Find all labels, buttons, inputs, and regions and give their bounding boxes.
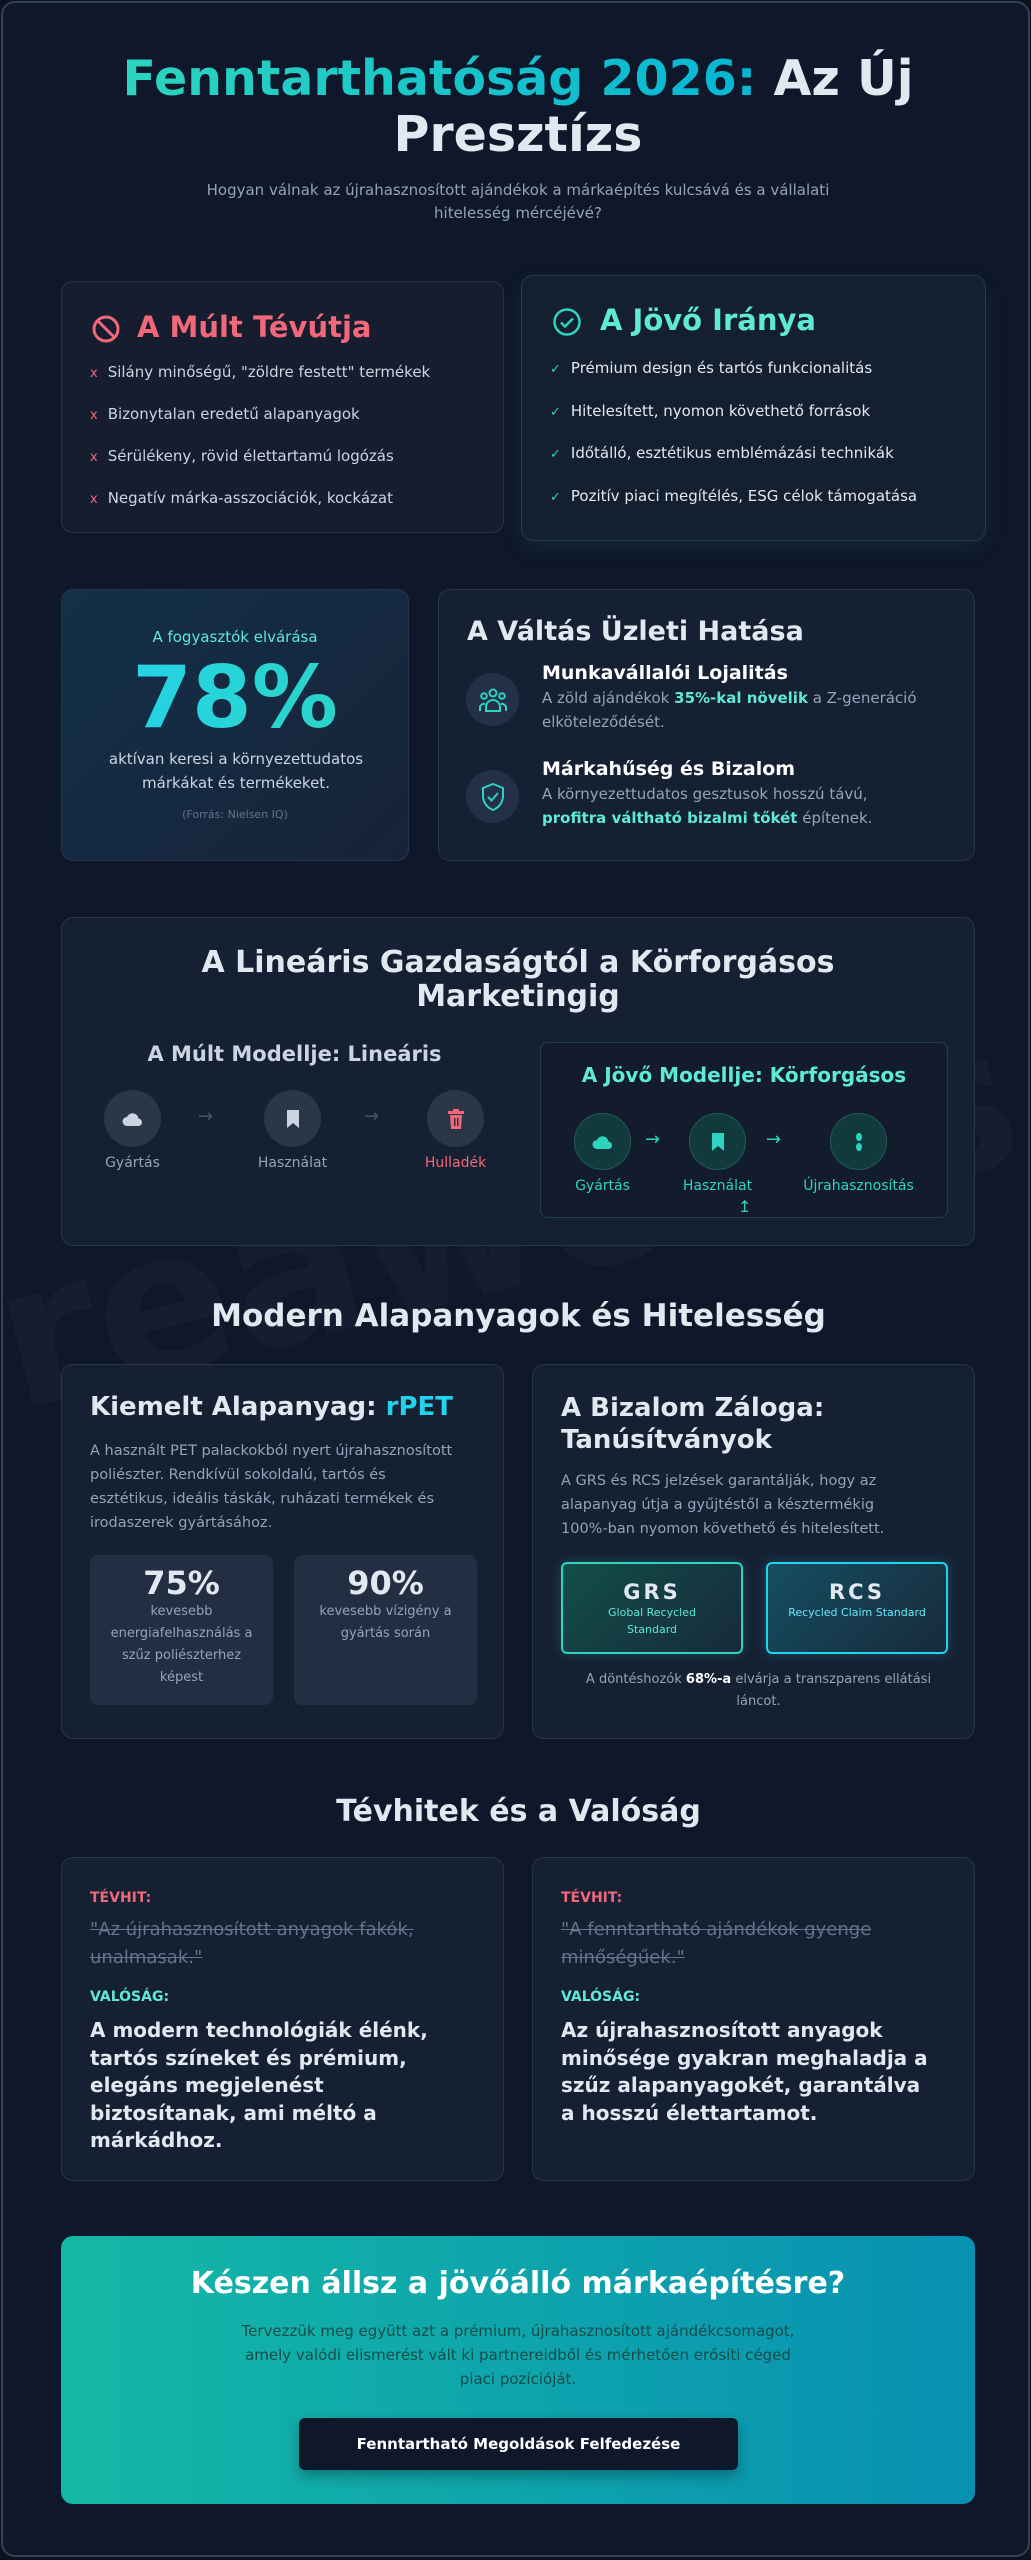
- linear model: [104, 1042, 486, 1171]
- big number: 78%: [132, 648, 338, 748]
- subtitle: [207, 181, 829, 222]
- panel: rPET: A használt PET palackokból nyert újrahasznosított: [90, 1443, 452, 1459]
- badge: GRS: GRS: [623, 1580, 681, 1604]
- heading: [201, 945, 834, 1014]
- panel: certificates: 100%-ban nyomon követhető és hitelesített.: [561, 1521, 884, 1537]
- arrow: →: [364, 1106, 379, 1127]
- list: x Silány minőségű, "zöldre festett" termékek: [90, 363, 430, 381]
- heading: A Lineáris Gazdaságtól a Körforgásos: [201, 945, 834, 980]
- icon: bookmark: [264, 1090, 321, 1147]
- badge: RCS: [766, 1562, 948, 1654]
- list: [90, 363, 430, 507]
- panel: certificates: A GRS és RCS jelzések garantálják, hogy az: [561, 1473, 876, 1489]
- list: x Bizonytalan eredetű alapanyagok: [90, 405, 360, 423]
- panel: myth 1: "Az újrahasznosított anyagok fakók, unalmasak.": [90, 1919, 414, 1968]
- icon: people: [466, 673, 519, 726]
- subtitle: hitelesség mércéjévé?: [434, 204, 602, 222]
- section heading: myths: Tévhitek és a Valóság: [336, 1794, 701, 1829]
- panel: certificates: A Bizalom Záloga:: [561, 1393, 824, 1423]
- panel: 78% stat: (Forrás: Nielsen IQ): [182, 808, 288, 821]
- CTA: [61, 2236, 975, 2504]
- icon: shield: [466, 770, 519, 823]
- circular model box: A Jövő Modellje: Körforgásos: [582, 1063, 906, 1087]
- panel: rPET: irodaszerek gyártásához.: [90, 1515, 272, 1531]
- icon: cloud: [104, 1090, 161, 1147]
- panel: myth 1: [61, 1857, 504, 2181]
- linear model: A Múlt Modellje: Lineáris: [147, 1042, 442, 1066]
- panel: myth 2: Az újrahasznosított anyagok minősége gyakran meghaladja a szűz alapanyagokét, garantálva: [561, 2018, 928, 2097]
- title: Fenntarthatóság 2026: Az Új Presztízs: [122, 50, 914, 163]
- list: ✓ Prémium design és tartós funkcionalitás: [550, 359, 872, 377]
- panel: 78% stat: aktívan keresi a környezettudatos márkákat és termékeket.: [109, 750, 363, 792]
- badge: GRS: [561, 1562, 743, 1654]
- arrow: →: [198, 1106, 213, 1127]
- panel: future direction: [521, 275, 986, 541]
- CTA: Tervezzük meg együtt azt a prémium, újrahasznosított ajándékcsomagot,: [242, 2322, 794, 2340]
- stat: 75%: 75%: [143, 1564, 220, 1602]
- panel: myth 2: [532, 1857, 975, 2181]
- panel: rPET: poliészter. Rendkívül sokoldalú, tartós és: [90, 1467, 386, 1483]
- icon: bookmark: [689, 1113, 746, 1170]
- heading: A Múlt Tévútja: [137, 310, 371, 344]
- item: loyalty: [542, 662, 917, 731]
- icon: cloud: [574, 1113, 631, 1170]
- arrow: →: [766, 1129, 781, 1150]
- circular model box: Újrahasznosítás: [803, 1178, 914, 1194]
- section heading: materials: Modern Alapanyagok és Hitelesség: [211, 1298, 826, 1334]
- circular model box: Gyártás: [575, 1178, 630, 1194]
- panel: business impact: [438, 589, 975, 861]
- panel: myth 2: TÉVHIT:: [561, 1890, 622, 1906]
- panel: myth 2: a hosszú élettartamot.: [561, 2100, 817, 2124]
- icon: recycle: [830, 1113, 887, 1170]
- CTA: piaci pozícióját.: [460, 2370, 576, 2388]
- button: [299, 2418, 738, 2470]
- list: ✓ Pozitív piaci megítélés, ESG célok támogatása: [550, 486, 917, 504]
- badge: RCS: Recycled Claim Standard: [788, 1606, 926, 1619]
- big number: [62, 648, 408, 748]
- list: x Negatív márka-asszociációk, kockázat: [90, 489, 393, 507]
- panel: myth 1: VALÓSÁG:: [90, 1989, 169, 2005]
- linear model: Használat: [258, 1155, 327, 1171]
- panel: myth 1: TÉVHIT:: [90, 1890, 151, 1906]
- panel: myth 2: "A fenntartható ajándékok gyenge minőségűek.": [561, 1919, 871, 1968]
- icon: forbidden: [92, 316, 120, 342]
- stat: 90%: [294, 1555, 477, 1705]
- panel: certificates: [532, 1364, 975, 1739]
- icon: check circle: [553, 308, 581, 336]
- heading: A Váltás Üzleti Hatása: [467, 616, 804, 647]
- stat: 90%: kevesebb vízigény a gyártás során: [319, 1604, 452, 1641]
- heading: Marketingig: [416, 979, 620, 1014]
- panel: certificates: alapanyag útja a gyűjtéstől a késztermékig: [561, 1497, 874, 1513]
- arrow: return: ↥: [738, 1197, 751, 1216]
- list: x Sérülékeny, rövid élettartamú logózás: [90, 447, 394, 465]
- item: trust: profitra váltható bizalmi tőkét építenek.: [542, 809, 872, 827]
- stat: 75%: kevesebb energiafelhasználás a szűz poliészterhez képest: [111, 1604, 252, 1685]
- list: [550, 359, 917, 504]
- item: trust: [542, 758, 872, 827]
- heading: A Jövő Iránya: [600, 303, 816, 337]
- circular model box: [540, 1042, 948, 1218]
- CTA: Készen állsz a jövőálló márkaépítésre?: [191, 2266, 845, 2301]
- panel: certificates: Tanúsítványok: [561, 1425, 772, 1455]
- list: ✓ Hitelesített, nyomon követhető források: [550, 402, 870, 420]
- panel: myth 1: A modern technológiák élénk, tartós színeket és prémium, elegáns megjelenést biztosítanak, ami méltó a márkádhoz.: [90, 2018, 428, 2152]
- button: Fenntartható Megoldások Felfedezése: [357, 2435, 680, 2453]
- panel: 78% stat: [61, 589, 409, 861]
- item: trust: Márkahűség és Bizalom: [542, 758, 795, 780]
- stat: 90%: 90%: [347, 1564, 424, 1602]
- linear model: Gyártás: [105, 1155, 160, 1171]
- badge: RCS: RCS: [829, 1580, 885, 1604]
- item: loyalty: A zöld ajándékok 35%-kal növelik a Z-generáció elköteleződését.: [542, 689, 917, 731]
- CTA: amely valódi elismerést vált ki partnereidből és mérhetően erősíti céged: [245, 2346, 791, 2364]
- stat: 75%: [90, 1555, 273, 1705]
- linear model: Hulladék: [425, 1155, 486, 1171]
- panel: past mistake: [61, 281, 504, 533]
- panel: myth 2: VALÓSÁG:: [561, 1989, 640, 2005]
- icon: trash: [427, 1090, 484, 1147]
- panel: certificates: láncot.: [736, 1694, 781, 1709]
- panel: rPET: esztétikus, ideális táskák, ruházati termékek és: [90, 1491, 434, 1507]
- badge: GRS: Global Recycled Standard: [608, 1606, 696, 1636]
- circular model box: Használat: [683, 1178, 752, 1194]
- item: trust: A környezettudatos gesztusok hosszú távú,: [542, 785, 868, 803]
- item: loyalty: Munkavállalói Lojalitás: [542, 662, 788, 684]
- panel: certificates: A döntéshozók 68%-a elvárja a transzparens ellátási: [586, 1672, 931, 1687]
- panel: linear to circular: [61, 917, 975, 1246]
- subtitle: Hogyan válnak az újrahasznosított ajándékok a márkaépítés kulcsává és a vállalati: [207, 181, 829, 199]
- panel: rPET: Kiemelt Alapanyag: rPET: [90, 1392, 453, 1422]
- list: ✓ Időtálló, esztétikus emblémázási technikák: [550, 444, 894, 462]
- panel: 78% stat: A fogyasztók elvárása: [152, 628, 318, 646]
- panel: rPET: [61, 1364, 504, 1739]
- arrow: →: [645, 1129, 660, 1150]
